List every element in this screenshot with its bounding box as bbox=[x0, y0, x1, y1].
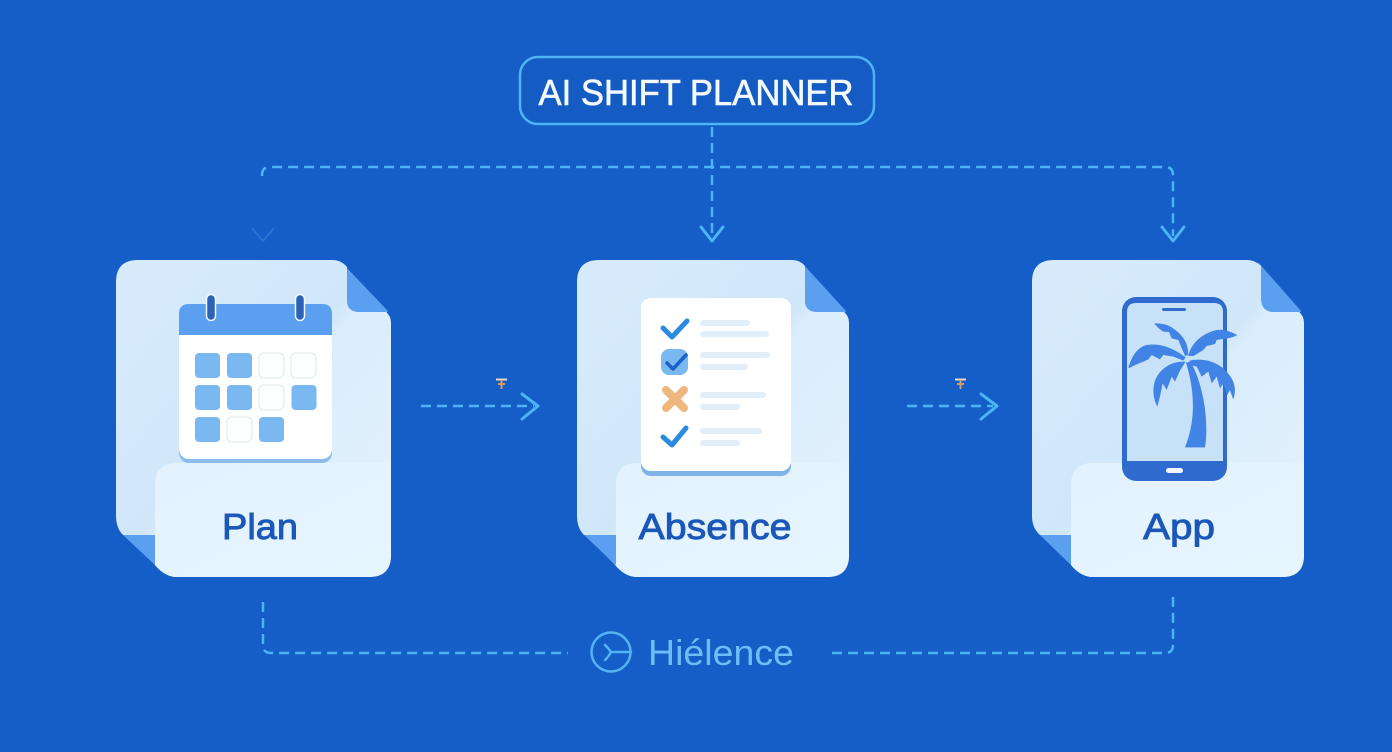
connector: bottom left feedback line bbox=[263, 602, 568, 653]
panel: App card bbox=[1032, 260, 1304, 577]
footer label: Hiélence bbox=[648, 632, 794, 673]
connector: bottom right feedback line bbox=[832, 597, 1173, 653]
arrow: to Absence bbox=[701, 227, 723, 241]
connector: top distribution lines bbox=[262, 127, 1173, 238]
label: Plan: Plan bbox=[222, 506, 298, 547]
title box bbox=[520, 57, 874, 124]
panel: Plan card bbox=[116, 260, 391, 577]
arrow: to Plan (faded) bbox=[252, 228, 274, 241]
label: App: App bbox=[1143, 506, 1215, 547]
icon: clock/plane bbox=[592, 632, 631, 672]
panel: Absence card bbox=[577, 260, 849, 577]
arrow: Absence to App bbox=[907, 394, 997, 419]
icon: calendar bbox=[179, 294, 332, 463]
icon: small glyph above first arrow bbox=[496, 380, 507, 389]
arrow: to App bbox=[1162, 227, 1184, 241]
icon: checklist bbox=[641, 298, 791, 476]
title box: AI SHIFT PLANNER bbox=[538, 72, 854, 113]
arrow: Plan to Absence bbox=[421, 394, 538, 419]
label: Absence: Absence bbox=[638, 506, 792, 547]
icon: small glyph above second arrow bbox=[955, 380, 966, 389]
icon: phone with palm tree bbox=[1122, 297, 1237, 481]
